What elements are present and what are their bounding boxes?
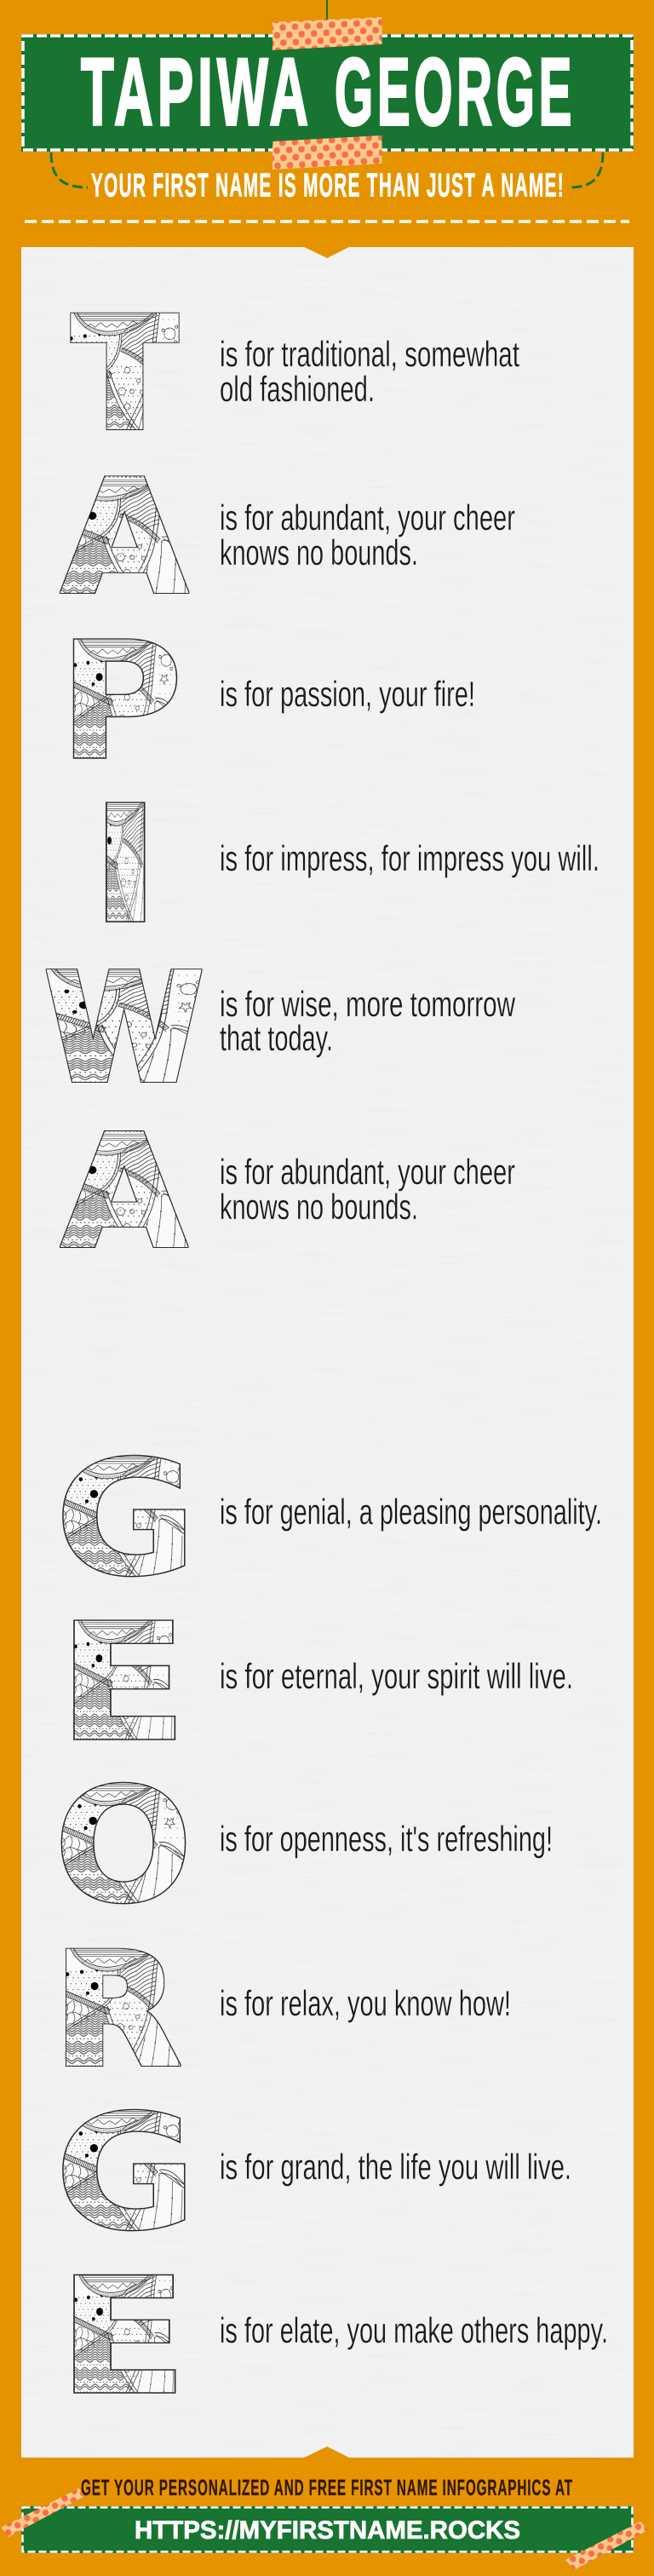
icon: letter G: G — [54, 2080, 198, 2267]
text: P meaning: is for passion, your fire! — [220, 674, 475, 714]
title banner — [21, 34, 634, 152]
icon: letter W: W — [45, 943, 204, 1115]
row: I — [88, 770, 600, 961]
icon: letter I: I — [88, 770, 164, 961]
row: R — [54, 1921, 511, 2100]
dashed bracket: left — [51, 152, 88, 187]
icon: letter P: P — [58, 607, 184, 797]
tape: top — [272, 17, 382, 50]
icon: letter R: R — [54, 1921, 180, 2100]
text: T meaning: is for traditional, somewhat — [220, 334, 519, 374]
text: A meaning — [220, 497, 515, 572]
text: W meaning: is for wise, more tomorrow — [220, 984, 515, 1024]
dashed divider — [25, 220, 629, 223]
icon: letter T: T — [74, 288, 175, 462]
title: TAPIWA — [81, 39, 313, 145]
row: G — [54, 2080, 571, 2267]
row: G — [54, 1426, 602, 1613]
hanging string — [326, 0, 328, 21]
text: A meaning: knows no bounds. — [220, 532, 418, 572]
icon: letter A: A — [62, 1102, 186, 1282]
text: A meaning: is for abundant, your cheer — [220, 497, 515, 538]
text: W meaning: that today. — [220, 1018, 333, 1058]
text: W meaning — [220, 984, 515, 1058]
tape: footer right — [565, 2521, 648, 2570]
icon: letter G: G — [54, 1426, 198, 1613]
text: R meaning: is for relax, you know how! — [220, 1983, 511, 2023]
tape: footer left — [2, 2488, 83, 2537]
tape: bottom — [272, 135, 382, 170]
footer banner — [21, 2506, 634, 2553]
text: A meaning — [220, 1152, 515, 1227]
row: P — [58, 607, 475, 797]
icon: letter E: E — [56, 1588, 189, 1778]
row: A — [62, 1102, 515, 1282]
row: A — [62, 447, 515, 628]
text: A meaning: knows no bounds. — [220, 1187, 418, 1227]
icon: letter A: A — [62, 447, 186, 628]
row: E — [56, 1588, 573, 1778]
row: E — [56, 2243, 608, 2431]
row: O — [54, 1754, 553, 1940]
url: HTTPS://MYFIRSTNAME.ROCKS — [135, 2516, 520, 2544]
row: W — [45, 943, 515, 1115]
icon: letter O: O — [54, 1754, 193, 1940]
dashed bracket: right — [570, 152, 603, 187]
icon: letter E: E — [56, 2243, 189, 2431]
text: A meaning: is for abundant, your cheer — [220, 1152, 515, 1192]
row: T — [74, 288, 519, 462]
text: T meaning: old fashioned. — [220, 369, 375, 409]
text: T meaning — [220, 334, 519, 409]
